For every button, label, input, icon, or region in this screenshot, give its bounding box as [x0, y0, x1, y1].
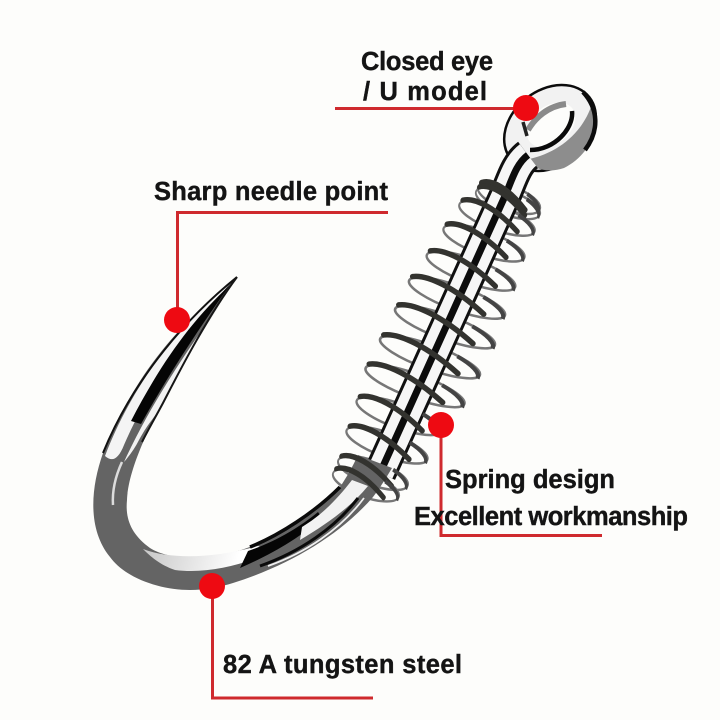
callout: spring design: Excellent workmanship — [414, 503, 688, 531]
hook bend body — [93, 277, 392, 590]
eye ring — [487, 67, 613, 189]
callout: sharp needle point: Sharp needle point — [154, 178, 388, 206]
callout: spring design — [414, 412, 688, 536]
callout: closed eye: Closed eye — [361, 48, 493, 76]
callout: closed eye: / U model — [363, 78, 487, 106]
callout: spring design: Spring design — [445, 466, 615, 494]
hook highlights — [103, 277, 368, 571]
callout: sharp needle point — [154, 178, 388, 333]
spring coils front — [332, 178, 543, 502]
hook shank — [380, 155, 528, 473]
callout: tungsten steel: 82 A tungsten steel — [223, 651, 462, 679]
spring coils back — [329, 175, 544, 508]
hook illustration — [93, 67, 613, 590]
callout: tungsten steel — [199, 573, 462, 698]
callout: closed eye — [335, 48, 539, 121]
